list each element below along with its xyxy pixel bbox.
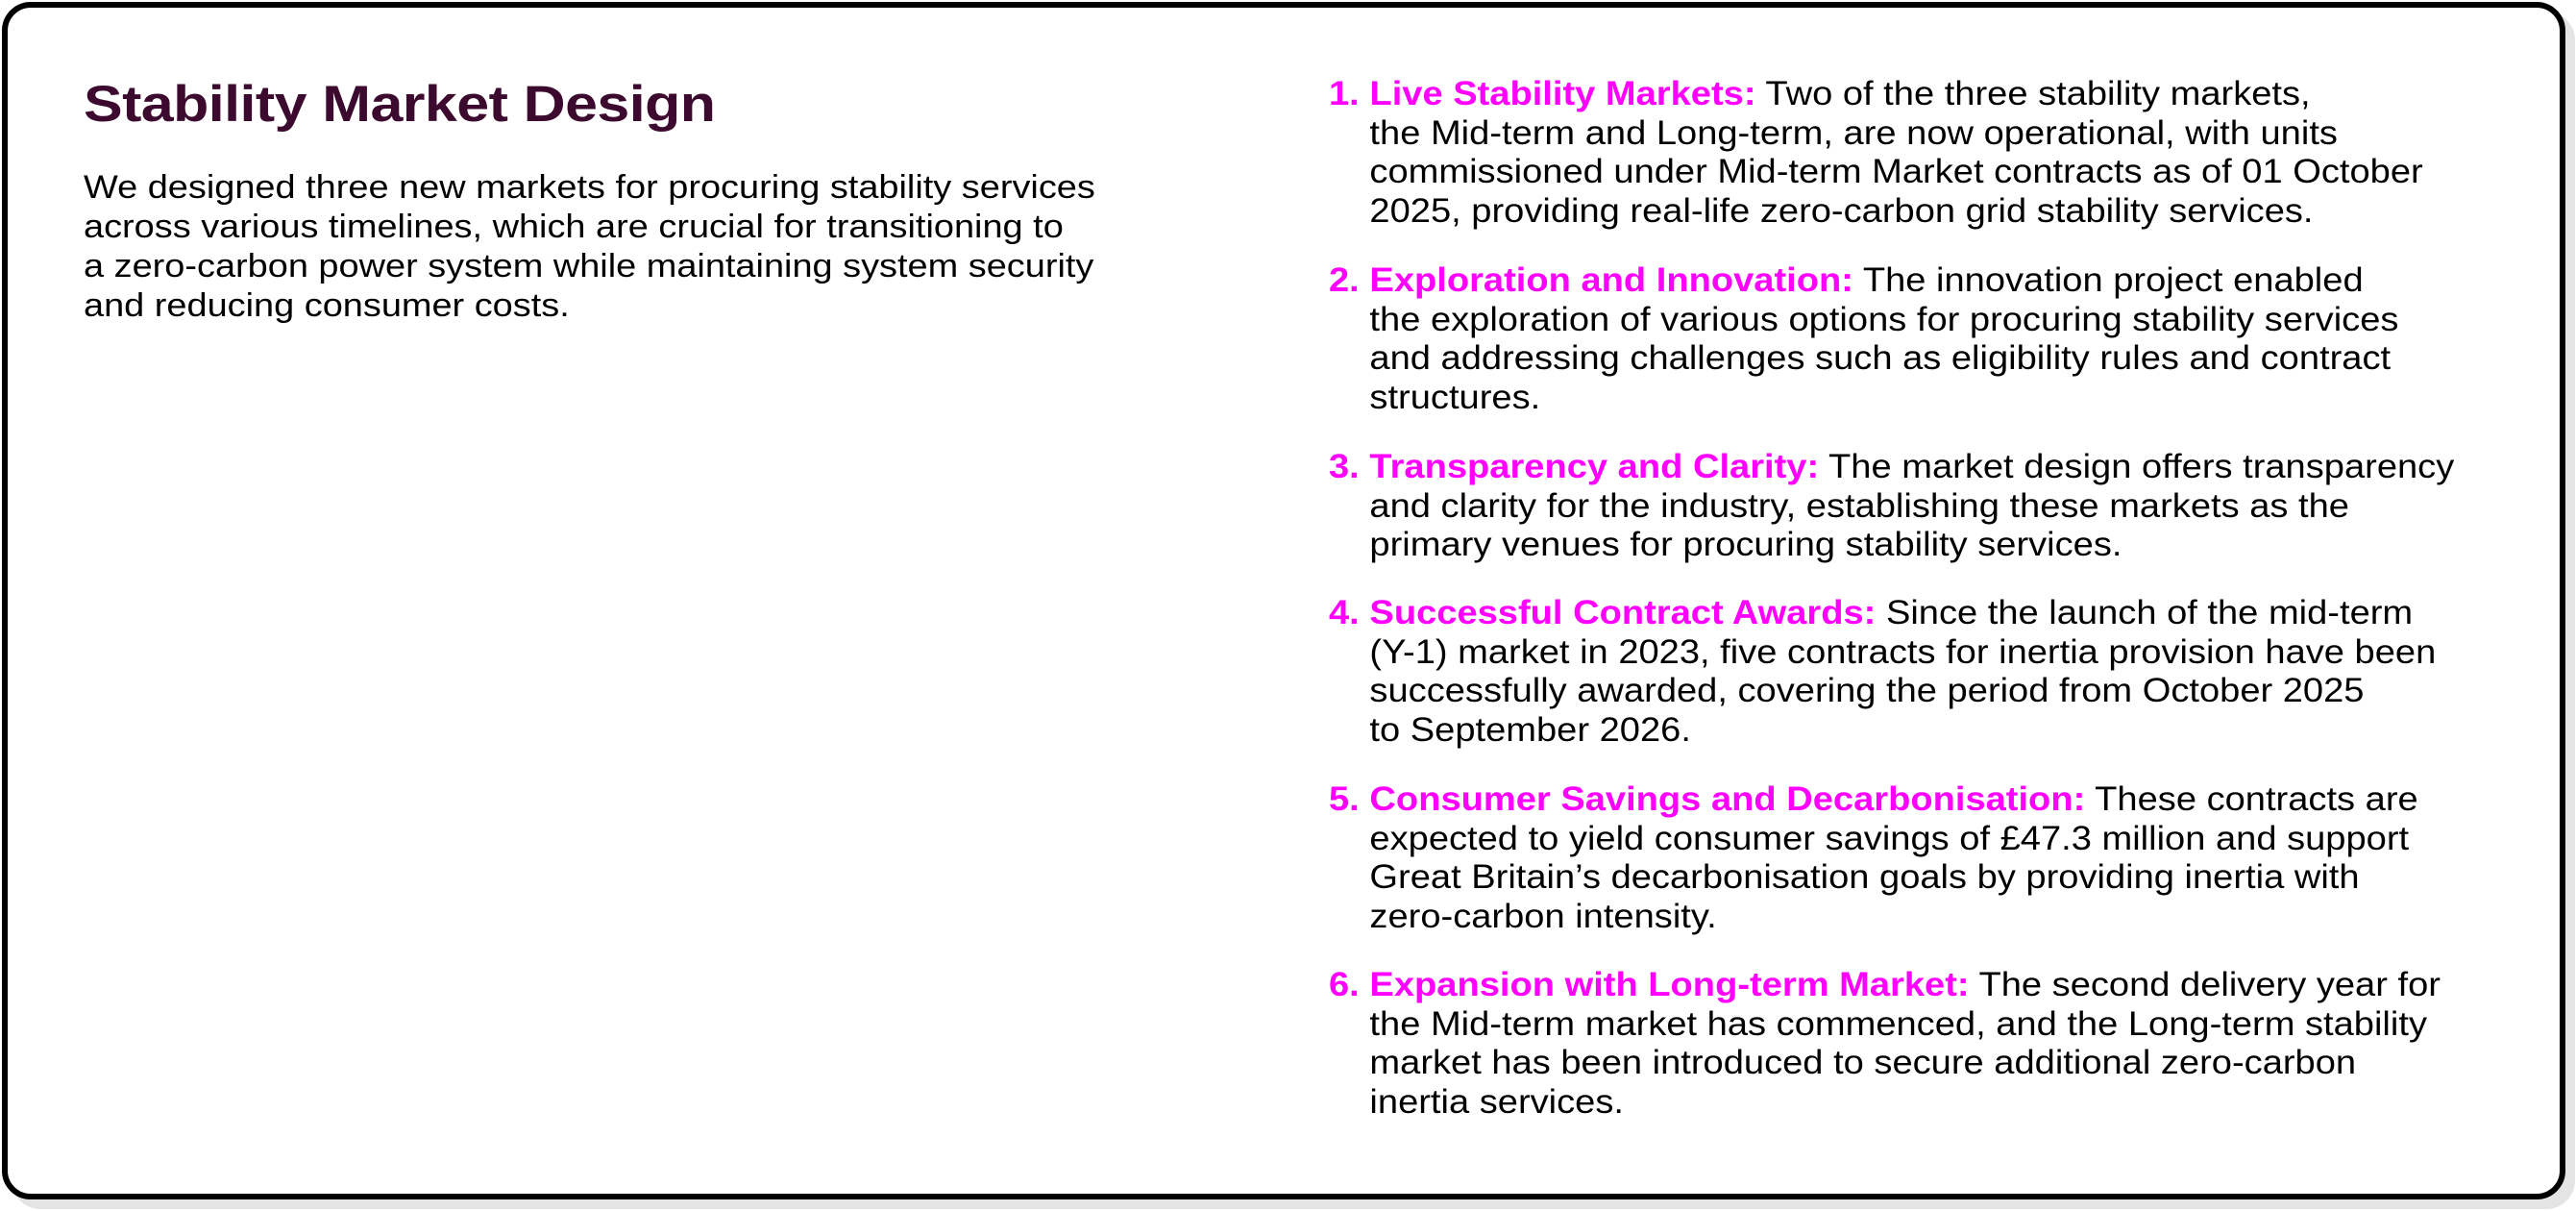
list item 2: 2. (1329, 261, 1360, 299)
list item 4: Successful Contract Awards: Since the launch of the mid-term (1369, 594, 2413, 631)
list item 5: expected to yield consumer savings of £47.3 million and support (1369, 820, 2409, 857)
list item 3: 3. (1329, 448, 1360, 485)
list item 4: successfully awarded, covering the period from October 2025 (1369, 672, 2364, 709)
list item 5 (1329, 780, 2418, 935)
list item 6: Expansion with Long-term Market: The second delivery year for (1369, 966, 2441, 1003)
list item 5: Great Britain’s decarbonisation goals by providing inertia with (1369, 858, 2360, 896)
list item 3: and clarity for the industry, establishing these markets as the (1369, 487, 2349, 525)
list item 4 (1329, 594, 2436, 749)
list item 2 (1329, 261, 2398, 416)
text block: intro: and reducing consumer costs. (84, 287, 570, 324)
list item 2: and addressing challenges such as eligibility rules and contract (1369, 339, 2391, 377)
list item 2: structures. (1369, 379, 1540, 416)
list item 1: commissioned under Mid-term Market contracts as of 01 October (1369, 153, 2423, 190)
list item 6: market has been introduced to secure additional zero-carbon (1369, 1044, 2356, 1081)
text block: intro (84, 169, 1095, 324)
list item 6: inertia services. (1369, 1083, 1624, 1121)
list item 6: the Mid-term market has commenced, and the Long-term stability (1369, 1005, 2427, 1043)
list item 3 (1329, 448, 2454, 563)
list item 1 (1329, 75, 2423, 230)
list item 1: 2025, providing real-life zero-carbon grid stability services. (1369, 192, 2314, 230)
list item 5: Consumer Savings and Decarbonisation: These contracts are (1369, 780, 2418, 818)
list item 6: 6. (1329, 966, 1360, 1003)
list item 1: 1. (1329, 75, 1360, 112)
title: Stability Market Design (84, 76, 715, 133)
list item 4: 4. (1329, 594, 1360, 631)
list item 1: the Mid-term and Long-term, are now operational, with units (1369, 114, 2338, 152)
text block: intro: across various timelines, which are crucial for transitioning to (84, 209, 1064, 245)
list item 6 (1329, 966, 2441, 1121)
list item 3: Transparency and Clarity: The market design offers transparency (1369, 448, 2454, 485)
list item 4: (Y-1) market in 2023, five contracts for inertia provision have been (1369, 633, 2436, 671)
list item 5: zero-carbon intensity. (1369, 898, 1717, 935)
list item 2: the exploration of various options for procuring stability services (1369, 301, 2398, 338)
list item 1: Live Stability Markets: Two of the three stability markets, (1369, 75, 2311, 112)
list item 5: 5. (1329, 780, 1360, 818)
list item 2: Exploration and Innovation: The innovation project enabled (1369, 261, 2364, 299)
text block: intro: a zero-carbon power system while maintaining system security (84, 248, 1093, 284)
list item 3: primary venues for procuring stability services. (1369, 526, 2122, 563)
text block: intro: We designed three new markets for procuring stability services (84, 169, 1095, 206)
list item 4: to September 2026. (1369, 711, 1691, 749)
